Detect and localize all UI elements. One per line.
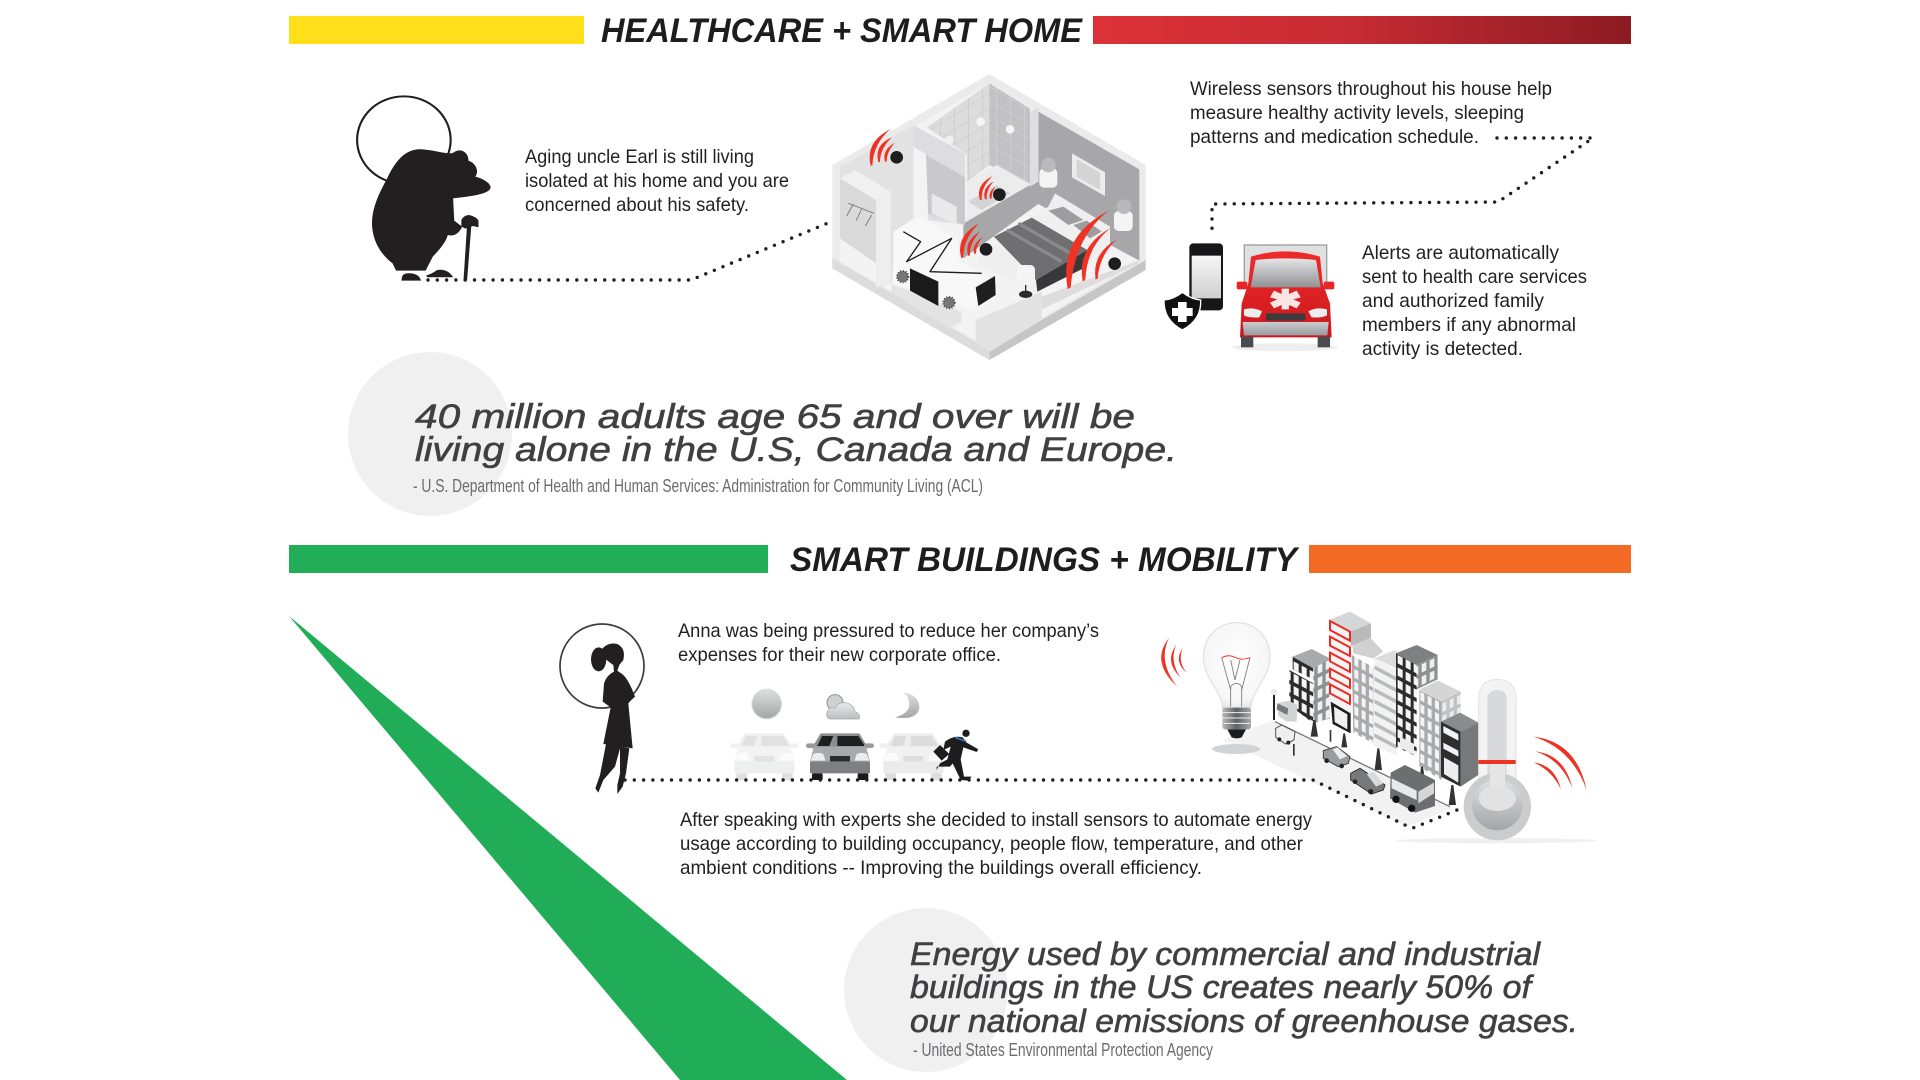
wall art and lamps xyxy=(1039,153,1133,231)
cable xyxy=(903,232,982,273)
source: ACL: - U.S. Department of Health and Human Services: Administration for Community Living (ACL) xyxy=(413,476,983,496)
vehicles xyxy=(1276,725,1435,813)
icons: sun, cloud, moon xyxy=(752,689,919,719)
signal arcs: thermometer xyxy=(1533,737,1587,790)
text: Anna intro xyxy=(678,620,1099,666)
text: Earl intro: Aging uncle Earl is still living xyxy=(525,146,754,168)
icon: car centre xyxy=(806,733,874,780)
icon: woman silhouette with circle xyxy=(560,624,644,794)
text: wireless sensors: measure healthy activity levels, sleeping xyxy=(1190,102,1524,124)
background circle: stat 1 xyxy=(348,352,512,516)
text: Anna intro: expenses for their new corporate office. xyxy=(678,644,1001,666)
statistic: 40 million adults: living alone in the U.S, Canada and Europe. xyxy=(415,431,1177,469)
text: Earl intro: isolated at his home and you are xyxy=(525,170,789,192)
text: alerts: activity is detected. xyxy=(1362,338,1523,360)
text: alerts: Alerts are automatically xyxy=(1362,242,1559,264)
signal arcs: bulb xyxy=(1161,638,1187,687)
building: dark corner xyxy=(1289,649,1330,723)
text: Anna intro: Anna was being pressured to reduce her company’s xyxy=(678,620,1099,642)
heading: Smart Buildings + Mobility: SMART BUILDINGS + MOBILITY xyxy=(790,541,1300,579)
text: wireless sensors: Wireless sensors throughout his house help xyxy=(1190,78,1552,100)
background circle: stat 2 xyxy=(844,908,1008,1072)
heading: Healthcare + Smart Home: HEALTHCARE + SMART HOME xyxy=(601,12,1083,50)
icon: elderly man silhouette with circle xyxy=(357,96,491,281)
text: alerts: sent to health care services xyxy=(1362,266,1587,288)
text: energy sensors xyxy=(680,809,1312,879)
icon: faded car left xyxy=(730,733,798,780)
building: front dark xyxy=(1441,713,1478,787)
dotted connector: man to house xyxy=(428,223,828,280)
text: Earl intro: concerned about his safety. xyxy=(525,194,749,216)
building: red tower xyxy=(1329,612,1383,733)
text: energy sensors: usage according to building occupancy, people flow, temperature, and other xyxy=(680,833,1303,855)
text: energy sensors: ambient conditions -- Improving the buildings overall efficiency. xyxy=(680,857,1202,879)
illustration: smart city xyxy=(1161,612,1597,843)
statistic: energy emissions: buildings in the US creates nearly 50% of xyxy=(910,969,1534,1005)
illustration: isometric smart home xyxy=(832,74,1146,360)
statistic: energy emissions: Energy used by commercial and industrial xyxy=(910,936,1541,972)
street trees and poles xyxy=(1293,720,1456,805)
shop and lamp post xyxy=(1271,690,1297,722)
light bulb xyxy=(1203,623,1270,754)
text: Earl intro xyxy=(525,146,789,216)
statistic: energy emissions: our national emissions of greenhouse gases. xyxy=(910,1003,1578,1039)
icon: red ambulance xyxy=(1232,245,1338,351)
building: grey windows xyxy=(1352,655,1373,743)
icon: faded car right xyxy=(879,733,947,780)
dotted connector: Anna to city xyxy=(625,780,1462,828)
statistic: energy emissions xyxy=(910,936,1578,1039)
text: alerts xyxy=(1362,242,1587,360)
icon: smartphone with medical shield xyxy=(1164,243,1223,330)
decorative green wedge xyxy=(289,616,847,1080)
icon: running businessman xyxy=(933,730,978,781)
bed xyxy=(978,193,1110,293)
statistic: 40 million adults xyxy=(415,398,1177,469)
text: wireless sensors xyxy=(1190,78,1552,148)
header bar: red gradient xyxy=(1093,16,1631,44)
header bar: orange xyxy=(1309,545,1631,573)
floor xyxy=(893,217,997,310)
thermometer xyxy=(1397,679,1597,843)
street plane xyxy=(1223,720,1452,827)
statistic: 40 million adults: 40 million adults age 65 and over will be xyxy=(415,398,1135,436)
stand and desk xyxy=(892,261,1138,352)
text: alerts: members if any abnormal xyxy=(1362,314,1576,336)
road edge xyxy=(1275,722,1450,807)
header bar: green xyxy=(289,545,768,573)
text: energy sensors: After speaking with experts she decided to install sensors to automate energy xyxy=(680,809,1312,831)
source: EPA: - United States Environmental Protection Agency xyxy=(913,1040,1213,1060)
dotted connector: sensors to phone xyxy=(1212,138,1593,237)
sensors with red signal arcs xyxy=(870,129,1121,289)
text: alerts: and authorized family xyxy=(1362,290,1544,312)
header bar: yellow xyxy=(289,16,584,44)
building: striped xyxy=(1374,650,1403,756)
building: light xyxy=(1419,681,1461,780)
text: wireless sensors: patterns and medication schedule. xyxy=(1190,126,1479,148)
building: black tall xyxy=(1396,645,1438,757)
